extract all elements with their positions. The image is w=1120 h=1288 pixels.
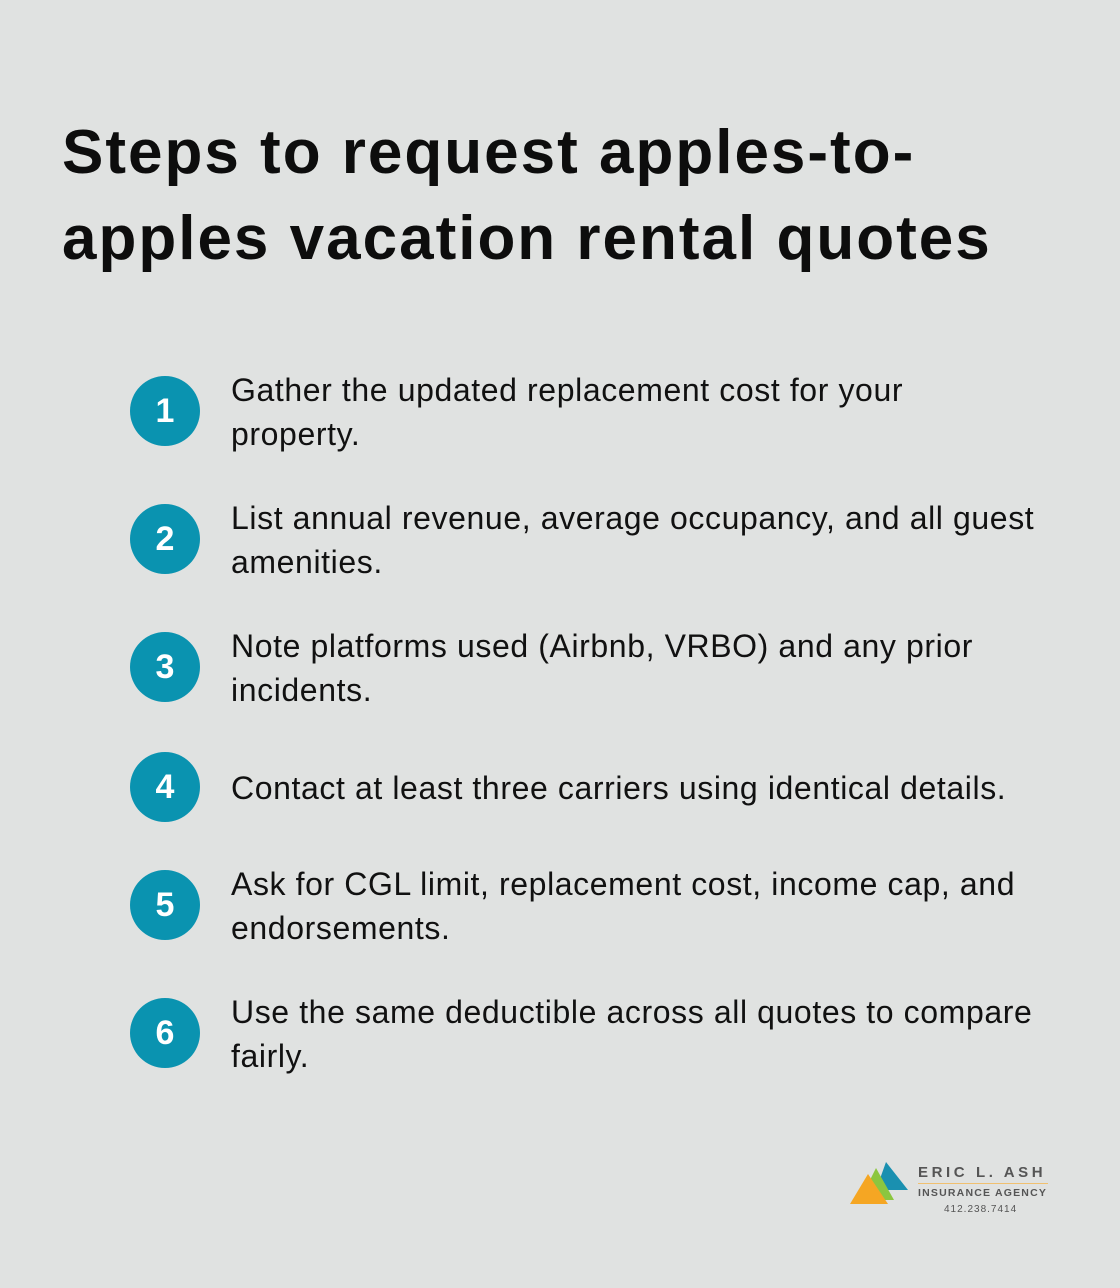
step 1: property. [231,416,360,452]
step 3: Note platforms used (Airbnb, VRBO) and any prior [231,628,973,664]
step 6: fairly. [231,1038,309,1074]
step 5: 5 [156,886,174,924]
step 3 [130,628,973,708]
logo: 412.238.7414 [944,1204,1017,1215]
step 3: 3 [156,648,174,686]
logo: INSURANCE AGENCY [918,1187,1047,1199]
step 4: 4 [156,768,174,806]
step 1 [130,372,903,452]
step 2: 2 [156,520,174,558]
title: apples vacation rental quotes [62,204,992,273]
logo: ERIC L. ASH [918,1164,1046,1181]
step 4: Contact at least three carriers using identical details. [231,770,1006,806]
title [62,118,992,273]
step 6: Use the same deductible across all quotes to compare [231,994,1032,1030]
logo [850,1162,1048,1215]
step 5: endorsements. [231,910,450,946]
step 1: Gather the updated replacement cost for your [231,372,903,408]
step 3: incidents. [231,672,372,708]
step 5 [130,866,1015,946]
step 2: amenities. [231,544,383,580]
step 5: Ask for CGL limit, replacement cost, income cap, and [231,866,1015,902]
step 1: 1 [156,392,174,430]
title: Steps to request apples-to- [62,118,915,187]
step 2 [130,500,1034,580]
step 6: 6 [156,1014,174,1052]
step 2: List annual revenue, average occupancy, and all guest [231,500,1034,536]
step 6 [130,994,1032,1074]
step 4 [130,752,1006,822]
